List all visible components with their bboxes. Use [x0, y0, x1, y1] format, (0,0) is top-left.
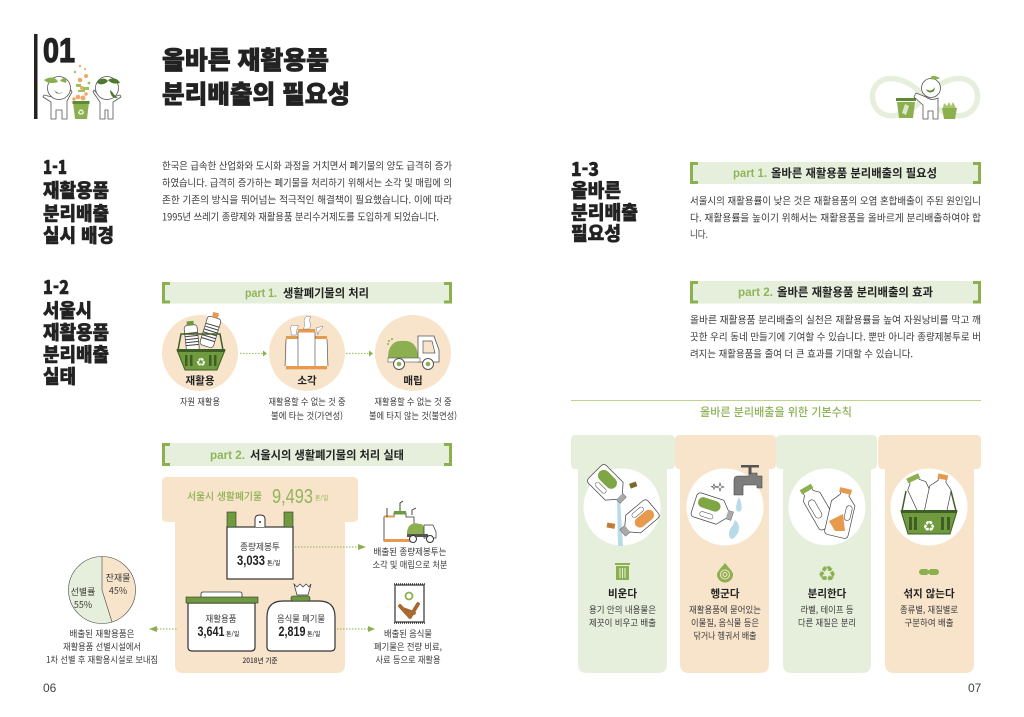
icon: incineration circle: 소각: [297, 373, 317, 388]
title: 분리배출의 필요성: [162, 75, 350, 111]
heading: 1-2: 재활용품: [43, 318, 109, 345]
pie chart: sorting rate: 선별률: [71, 585, 95, 598]
text block: necessity: [690, 192, 981, 241]
caption: standard bag disposal: 배출된 종량제봉투는: [374, 545, 446, 558]
text block: background: 하였습니다. 급격히 증가하는 폐기물을 처리하기 위해서는 소각 및 매립에 의: [162, 174, 452, 190]
text block: background: 한국은 급속한 산업화와 도시화 과정을 거치면서 폐기물의 양도 급격히 증가: [162, 158, 452, 172]
caption: standard bag disposal: 소각 및 매립으로 처분: [372, 558, 448, 571]
icon: recycling circle: [162, 311, 238, 391]
heading: 1-1: 재활용품: [43, 176, 109, 203]
icon: factory and truck: [384, 501, 436, 542]
icon: recyclables bin 3,641: 3,641: [198, 623, 225, 639]
banner: part 1 right: [690, 162, 981, 184]
arrow: [240, 350, 267, 356]
icon: basket of bottles: ♻: [923, 519, 935, 535]
icon: recycling circle: 재활용: [186, 373, 215, 388]
panel: Seoul household waste: 9,493: [272, 486, 313, 508]
icon: standard bag 3,033: 3,033: [237, 552, 265, 568]
banner: part 1 right: part 1.: [733, 166, 767, 180]
arrow: recyclables to sorting: [149, 626, 178, 632]
pie chart: sorting rate: 55%: [74, 598, 92, 611]
text block: background: 존한 기존의 방식을 뛰어넘는 적극적인 해결책이 필요했습니다. 이에 따라: [162, 192, 452, 206]
panel: Seoul household waste: 2018년 기준: [242, 656, 278, 666]
caption: standard bag disposal: [372, 545, 448, 571]
icon: compost package: [394, 584, 425, 623]
captions: treatment methods: 재활용할 수 없는 것 중: [374, 395, 452, 408]
pie chart: sorting rate: [68, 556, 136, 624]
page number right: 07: [968, 681, 982, 695]
arrow: [346, 350, 373, 356]
panel: rule 2 rinse: 헹군다: [711, 586, 740, 601]
banner: part 1 left: part 1.: [245, 286, 277, 300]
arrow: bag to disposal: [295, 544, 366, 550]
icon: no mixing: [919, 566, 939, 578]
heading: 1-3: 필요성: [571, 219, 621, 246]
panel: Seoul household waste: 톤/일: [315, 493, 328, 502]
heading: 1-2: 실태: [43, 362, 76, 389]
icon: recycling circle: ♻: [196, 356, 206, 369]
title: 올바른 재활용품: [162, 41, 329, 77]
panel: rule 2 rinse: 재활용품에 묻어있는: [689, 603, 761, 616]
text block: background: [162, 158, 452, 224]
panel: rule 3 separate: [776, 435, 877, 673]
banner: part 1 left: [162, 282, 452, 304]
caption: recyclables sorting: 재활용품 선별시설에서: [63, 640, 141, 653]
heading: 1-1: [43, 153, 114, 248]
text block: effects: 끗한 우리 동네 만들기에 기여할 수 있습니다. 뿐만 아니라 종량제봉투로 버: [690, 328, 981, 344]
panel: Seoul household waste: 서울시 생활폐기물: [187, 488, 262, 503]
icon: food waste bag 2,819: 2,819: [278, 623, 306, 639]
banner: part 2 left: [162, 443, 452, 466]
panel: rule 2 rinse: [675, 435, 776, 673]
icon: standard bag 3,033: 톤/일: [267, 558, 280, 567]
icon: separated bottles: [797, 482, 858, 539]
banner: part 2 right: part 2.: [738, 285, 773, 299]
text block: necessity: 니다.: [690, 226, 708, 241]
panel: rule 1 empty: [571, 435, 675, 673]
text block: effects: 려지는 재활용품을 줄여 더 큰 효과를 기대할 수 있습니다.: [690, 346, 913, 360]
heading: 1-2: 분리배출: [43, 340, 109, 367]
heading: 1-2: [43, 273, 109, 389]
icon: recyclables bin 3,641: [186, 592, 258, 651]
captions: treatment methods: 불에 타는 것(가연성): [271, 409, 343, 422]
page number left: 06: [43, 681, 57, 695]
captions: treatment methods: 자원 재활용: [180, 395, 220, 408]
title: [162, 41, 350, 111]
heading: 1-3: 1-3: [571, 155, 599, 182]
caption: food waste: 배출된 음식물: [384, 627, 432, 640]
panel: rule 4 do not mix: 종류별, 재질별로: [900, 603, 958, 616]
panel: rule 3 separate: 분리한다: [808, 586, 847, 601]
icon: mascots with flower bin: ♻: [77, 108, 85, 117]
heading: 1-1: 분리배출: [43, 199, 109, 226]
icon: tap and bottle: [690, 465, 762, 539]
panel: rule 3 separate: 라벨, 테이프 등: [800, 603, 854, 616]
caption: recyclables sorting: 1차 선별 후 재활용시설로 보내짐: [46, 653, 158, 666]
icon: incineration circle: [269, 315, 345, 391]
captions: treatment methods: [180, 395, 457, 422]
icon: landfill circle: 매립: [403, 373, 423, 388]
caption: recyclables sorting: [46, 627, 158, 666]
heading: basic rules: 올바른 분리배출을 위한 기본수칙: [700, 404, 852, 420]
icon: pouring bottles: [586, 463, 661, 546]
panel: rule 4 do not mix: [878, 435, 981, 673]
captions: treatment methods: 재활용할 수 없는 것 중: [268, 395, 346, 408]
heading: 1-2: 1-2: [43, 273, 69, 300]
pie chart: sorting rate: 45%: [109, 584, 127, 597]
icon: food waste bag 2,819: 음식물 폐기물: [277, 612, 325, 625]
heading: 1-3: 올바른: [571, 176, 621, 203]
text block: effects: 올바른 재활용품 분리배출의 실천은 재활용률을 높여 자원낭비를 막고 깨: [690, 312, 981, 326]
panel: rule 2 rinse: 닦거나 헹궈서 배출: [694, 629, 756, 642]
icon: standard bag 3,033: 종량제봉투: [240, 540, 280, 553]
heading: 1-1: 실시 배경: [43, 221, 114, 248]
banner: part 1 right: 올바른 재활용품 분리배출의 필요성: [771, 165, 937, 181]
icon: infinity mascot: [872, 76, 978, 119]
icon: landfill circle: [375, 315, 451, 391]
icon: standard bag 3,033: [227, 512, 293, 579]
panel: rule 4 do not mix: 구분하여 배출: [904, 616, 954, 629]
icon: recyclables bin 3,641: 톤/일: [226, 629, 239, 638]
heading: 1-1: 1-1: [43, 153, 67, 180]
panel: rule 2 rinse: 이물질, 음식물 등은: [691, 616, 759, 629]
banner: part 2 left: 서울시의 생활폐기물의 처리 실태: [250, 447, 404, 463]
panel: rule 4 do not mix: 섞지 않는다: [903, 586, 955, 601]
icon: water drop: [717, 563, 733, 582]
section marker: 01: [34, 32, 75, 119]
caption: recyclables sorting: 배출된 재활용품은: [70, 627, 134, 640]
banner: part 2 left: part 2.: [210, 448, 245, 462]
panel: rule 1 empty: 제끗이 비우고 배출: [589, 616, 656, 629]
heading: 1-3: [571, 155, 638, 246]
icon: food waste bag 2,819: [267, 584, 335, 651]
heading: 1-3: 분리배출: [571, 198, 638, 225]
icon: mascots with flower bin: [43, 65, 121, 119]
banner: part 1 left: 생활폐기물의 처리: [283, 285, 369, 301]
banner: part 2 right: [690, 281, 981, 304]
caption: food waste: [374, 627, 442, 666]
panel: Seoul household waste: [162, 477, 358, 673]
icon: food waste bag 2,819: 톤/일: [307, 629, 320, 638]
pie chart: sorting rate: 잔재물: [106, 571, 130, 584]
text block: necessity: 서울시의 재활용률이 낮은 것은 재활용품의 오염 혼합배출이 주된 원인입니: [690, 192, 981, 208]
captions: treatment methods: 불에 타지 않는 것(불연성): [369, 409, 457, 422]
icon: recycling symbol: ♻: [818, 562, 836, 586]
text block: effects: [690, 312, 981, 360]
panel: rule 1 empty: 용기 안의 내용물은: [589, 603, 656, 616]
icon: recyclables bin 3,641: 재활용품: [206, 612, 236, 625]
icon: basket of bottles: [901, 472, 957, 535]
panel: rule 1 empty: 비운다: [608, 586, 637, 601]
banner: part 2 right: 올바른 재활용품 분리배출의 효과: [777, 284, 933, 300]
heading: 1-2: 서울시: [43, 296, 92, 323]
caption: food waste: 폐기물은 전량 비료,: [374, 640, 442, 653]
section marker: 01: 01: [43, 32, 75, 70]
text block: necessity: 다. 재활용률을 높이기 위해서는 재활용품을 올바르게 분리배출하여야 합: [690, 210, 981, 224]
text block: background: 1995년 쓰레기 종량제와 재활용품 분리수거제도를 도입하게 되었습니다.: [162, 208, 439, 224]
panel: rule 3 separate: 다른 재질은 분리: [798, 616, 856, 629]
caption: food waste: 사료 등으로 재활용: [376, 653, 440, 666]
arrow: food waste: [337, 626, 375, 632]
icon: trash can: [615, 563, 630, 580]
